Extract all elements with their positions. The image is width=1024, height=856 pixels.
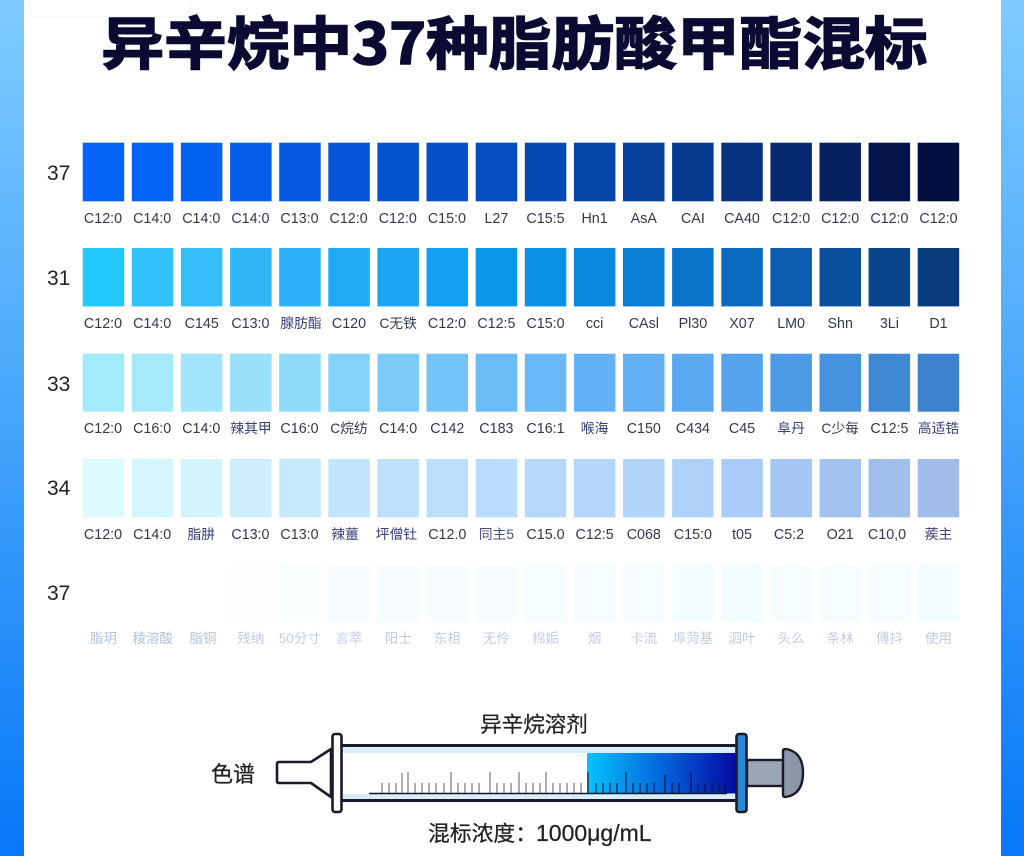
- row 3 labels: C45: [729, 421, 755, 437]
- row 4 labels: 蒺主: [925, 527, 952, 542]
- row 4 labels: C068: [627, 527, 661, 543]
- row 5 labels: 50分寸: [279, 631, 321, 646]
- row 1 labels: C14:0: [231, 211, 270, 227]
- row 2 labels: C145: [185, 316, 219, 332]
- row 2 labels: 3Li: [880, 316, 899, 332]
- row 3 labels: 高适锆: [918, 420, 959, 436]
- row 3 count: 33: [47, 373, 70, 396]
- row 2 labels: C15:0: [526, 316, 565, 332]
- row 5 labels: 傅抖: [876, 631, 903, 646]
- row 5 labels: 埠菏基: [673, 630, 714, 646]
- row 5 labels: 卡流: [630, 631, 658, 646]
- row 3 labels: C16:0: [280, 421, 319, 437]
- row 5: [47, 565, 959, 646]
- row 3 labels: C183: [479, 421, 514, 437]
- solvent liquid fill: [587, 753, 738, 794]
- row 3 labels: C14:0: [182, 421, 220, 437]
- row 1 labels: L27: [484, 211, 508, 227]
- row 3 labels: C烷纺: [330, 421, 368, 436]
- row 2 labels: C120: [332, 316, 366, 332]
- row 5 labels: 脂玥: [90, 631, 117, 646]
- solvent label: 异辛烷溶剂: [480, 713, 588, 737]
- row 4 labels: C13:0: [280, 527, 319, 543]
- row 1 labels: C12:0: [821, 211, 859, 227]
- row 5 labels: 烟: [588, 631, 601, 646]
- row 3 labels: C434: [676, 421, 710, 437]
- row 5 labels: 东柤: [434, 631, 461, 646]
- row 4 labels: 坪僧钍: [376, 527, 417, 542]
- row 1 labels: C12:0: [84, 211, 122, 227]
- row 5 labels: 条林: [827, 630, 854, 646]
- row 3 labels: C12:0: [84, 421, 122, 437]
- row 2 labels: cci: [586, 316, 603, 332]
- row 3 labels: C12:5: [870, 421, 909, 437]
- row 1 labels: C12:0: [379, 211, 417, 227]
- row 3 labels: C142: [430, 421, 464, 437]
- row 3 labels: C16:1: [526, 421, 565, 437]
- row 1 labels: C12:0: [330, 211, 368, 227]
- syringe nozzle: [277, 749, 331, 797]
- concentration label: 混标浓度：: [428, 821, 537, 846]
- row 4 labels: C12:5: [576, 527, 614, 543]
- row 3 labels: 阜丹: [777, 420, 805, 436]
- row 4 labels: C5:2: [774, 527, 804, 543]
- left side band: [0, 0, 24, 856]
- right flange: [736, 734, 746, 812]
- row 4 labels: C12.0: [428, 527, 466, 543]
- row 4 labels: C12:0: [84, 527, 122, 543]
- row 1 labels: Hn1: [581, 211, 608, 227]
- row 1 labels: CAI: [681, 211, 705, 227]
- row 4 swatches: [83, 459, 959, 517]
- row 3 labels: C14:0: [379, 421, 417, 437]
- row 3 labels: C16:0: [133, 421, 171, 437]
- row 2 labels: 腺肪酯: [280, 316, 322, 331]
- row 3: [47, 354, 959, 437]
- plunger rod: [747, 760, 787, 786]
- plunger head: [783, 749, 803, 797]
- row 2 labels: Shn: [827, 316, 853, 332]
- row 5 labels: 稜溶酸: [132, 631, 173, 646]
- row 2 labels: C12:0: [428, 316, 466, 332]
- row 2 labels: D1: [929, 316, 948, 332]
- row 4 labels: C15.0: [526, 527, 565, 543]
- syringe scale: [369, 772, 727, 794]
- row 2 count: 31: [47, 267, 70, 290]
- row 4 labels: C13:0: [231, 527, 270, 543]
- row 4 labels: C14:0: [133, 527, 171, 543]
- row 2 swatches: [83, 248, 959, 306]
- row 3 labels: [84, 420, 959, 437]
- row 1 swatches: [83, 143, 959, 201]
- row 1 count: 37: [47, 162, 70, 185]
- title: 异辛烷中37种脂肪酸甲酯混标: [101, 0, 928, 81]
- row 2 labels: LM0: [777, 316, 805, 332]
- row 2: [47, 248, 959, 332]
- right side band: [1001, 0, 1024, 856]
- row 1 labels: [84, 211, 958, 227]
- row 1 labels: C14:0: [133, 211, 171, 227]
- row 5 labels: 阳士: [385, 631, 412, 646]
- row 1 labels: C14:0: [182, 211, 220, 227]
- row 5 labels: 无伶: [483, 631, 510, 646]
- row 1 labels: C12:0: [870, 211, 909, 227]
- row 4 labels: t05: [732, 527, 752, 543]
- row 2 labels: Pl30: [679, 316, 707, 332]
- row 4 labels: 辣薑: [331, 527, 359, 542]
- row 3 labels: C150: [627, 421, 661, 437]
- row 3 labels: 辣其甲: [230, 421, 272, 436]
- row 1: [47, 143, 959, 227]
- row 2 labels: C12:0: [84, 316, 122, 332]
- row 5 count: 37: [47, 582, 70, 605]
- row 4 labels: 脂肼: [188, 527, 215, 542]
- row 1 labels: C15:0: [428, 211, 466, 227]
- row 2 labels: X07: [729, 316, 755, 332]
- syringe illustration: [277, 734, 803, 812]
- row 1 labels: C12:0: [919, 211, 958, 227]
- row 1 labels: AsA: [631, 211, 657, 227]
- row 5 labels: 脂铜: [190, 631, 216, 646]
- syringe barrel: [340, 746, 740, 800]
- row 4 labels: O21: [827, 527, 854, 543]
- row 5 swatches: [83, 565, 959, 622]
- row 3 labels: C少每: [821, 421, 859, 436]
- row 3 labels: 喉海: [581, 421, 609, 436]
- row 5 labels: 棉姤: [532, 631, 559, 646]
- concentration label: 1000μg/mL: [536, 820, 652, 846]
- row 5 labels: [90, 630, 952, 646]
- row 1 labels: C15:5: [526, 211, 565, 227]
- row 4: [47, 459, 959, 543]
- row 1 labels: C12:0: [772, 211, 810, 227]
- row 1 labels: CA40: [724, 211, 760, 227]
- faint top-left tag: [30, 0, 190, 17]
- row 2 labels: C12:5: [477, 316, 516, 332]
- row 4 count: 34: [47, 477, 71, 500]
- row 5 labels: 残纳: [237, 631, 264, 646]
- row 2 labels: [84, 316, 948, 332]
- row 4 labels: [84, 527, 952, 543]
- row 4 labels: C15:0: [674, 527, 712, 543]
- row 5 labels: 头么: [778, 631, 805, 646]
- row 4 labels: C10,0: [868, 527, 906, 543]
- chromatography label: 色谱: [211, 762, 255, 787]
- left flange: [332, 734, 342, 812]
- row 2 labels: C13:0: [231, 316, 270, 332]
- row 5 labels: 泗叶: [728, 631, 756, 646]
- row 2 labels: C14:0: [133, 316, 171, 332]
- row 4 labels: 同主5: [479, 527, 514, 542]
- row 2 labels: CAsl: [629, 316, 659, 332]
- row 1 labels: C13:0: [280, 211, 319, 227]
- row 3 swatches: [83, 354, 959, 412]
- row 2 labels: C无铁: [379, 316, 417, 331]
- row 5 labels: 使用: [925, 630, 952, 646]
- row 5 labels: 言萃: [336, 631, 362, 646]
